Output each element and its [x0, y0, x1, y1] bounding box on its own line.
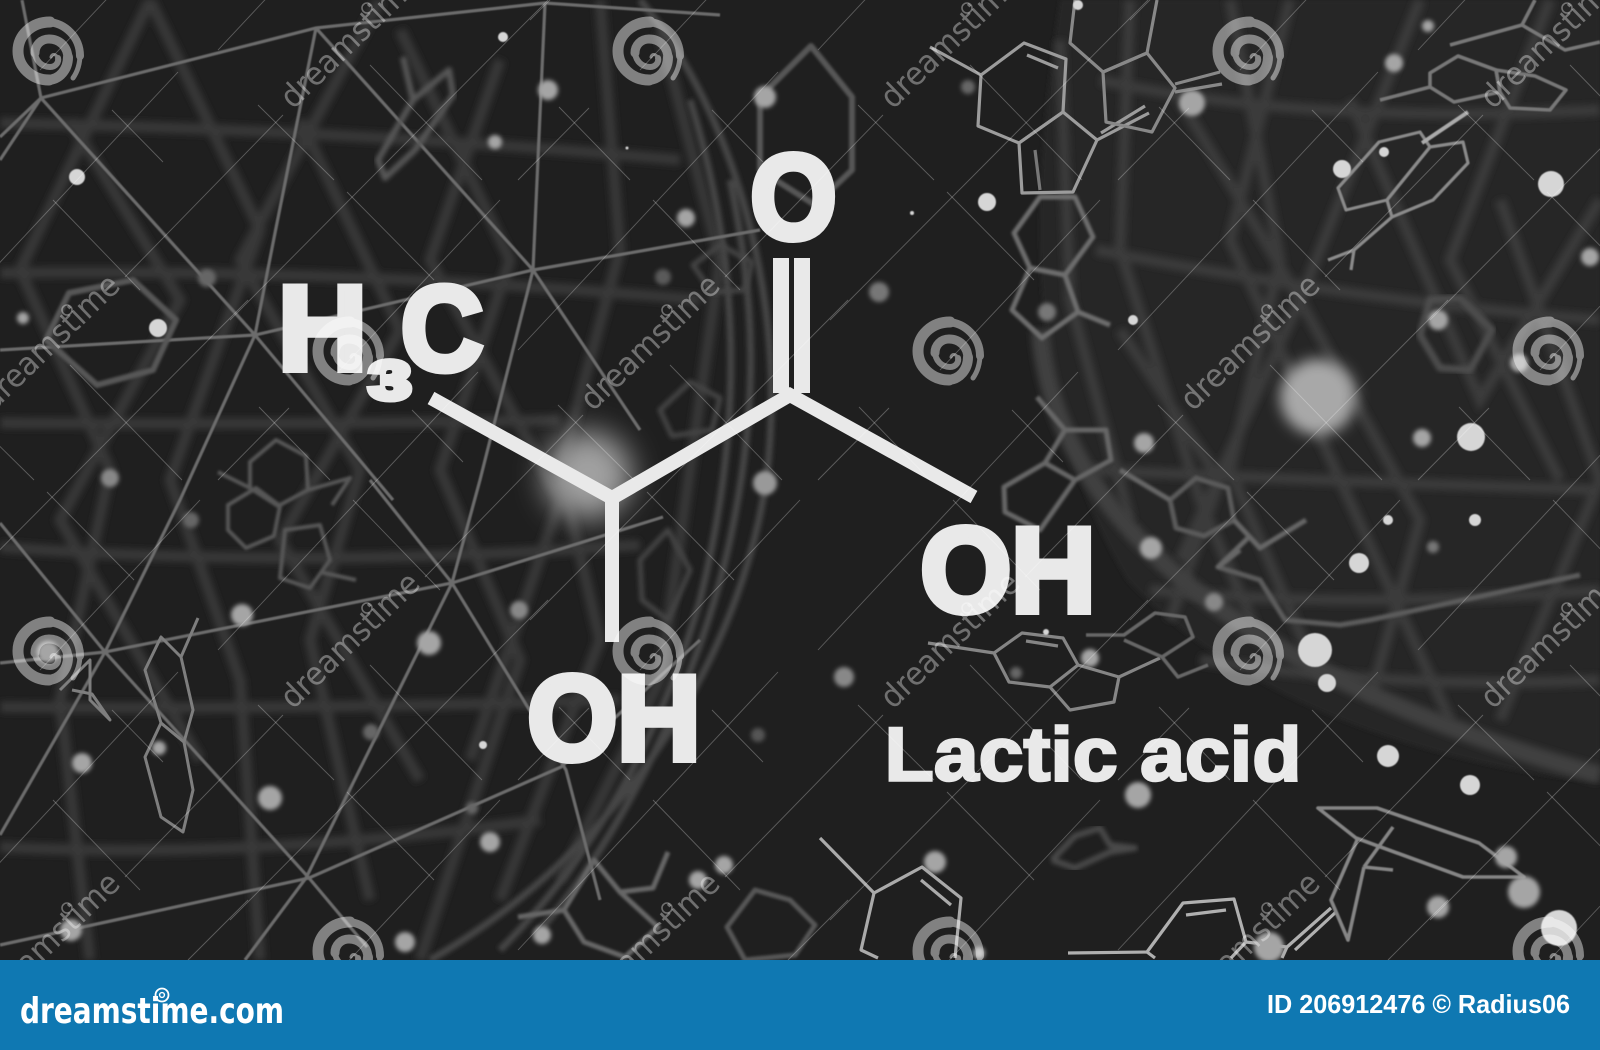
formula labels: H — [278, 262, 367, 396]
glow: large sphere right — [1280, 359, 1356, 435]
watermark text: dreamstime — [272, 564, 427, 716]
footer credit: image ID and author: ID 206912476 © Radius06 — [1267, 989, 1570, 1019]
right network sphere — [1040, 0, 1600, 783]
molecule: right dark cluster — [1420, 298, 1492, 370]
footer logo: dreamstime.com: dreamstime.com — [20, 991, 284, 1032]
molecule: bottom right chain — [1068, 899, 1336, 958]
single and double bonds — [431, 258, 974, 642]
molecule: bottom centre-left — [518, 852, 668, 957]
watermark text: dreamstime — [1172, 266, 1327, 418]
formula labels: O — [750, 130, 836, 264]
chemical structure: lactic acid — [278, 130, 1096, 786]
molecule: top centre — [930, 0, 1222, 193]
footer bar — [0, 960, 1600, 1050]
glow: central carbon — [544, 431, 632, 519]
glow spots — [544, 359, 1356, 519]
formula labels: OH — [920, 504, 1096, 638]
molecule: bottom right — [1318, 808, 1524, 940]
molecule: below centre — [1012, 197, 1110, 338]
network strands — [0, 0, 760, 960]
watermark text: dreamstime — [1172, 864, 1327, 1016]
molecule: lower left chain — [60, 618, 198, 832]
watermark text: dreamstime — [572, 266, 727, 418]
molecule: top left squiggle — [378, 57, 453, 178]
molecule: upper right fused rings — [1328, 112, 1468, 270]
left network sphere — [0, 0, 771, 960]
molecule: hexagon left — [46, 280, 176, 385]
molecule: left middle rings — [218, 440, 356, 588]
formula labels: C — [401, 262, 483, 396]
watermark text: dreamstime — [872, 564, 1027, 716]
molecule: right of hydroxyl — [1004, 397, 1580, 625]
formula labels — [278, 130, 1096, 786]
molecule: under hydroxyl — [928, 613, 1208, 710]
molecule: bottom ring — [727, 890, 815, 960]
formula labels: 3 — [369, 351, 411, 411]
title: Lactic acid: Lactic acid — [884, 712, 1302, 798]
watermark text: dreamstime — [572, 864, 727, 1016]
molecule: bottom centre — [820, 838, 961, 958]
molecule: behind carbonyl — [640, 245, 752, 620]
molecule: top centre ring — [760, 46, 852, 205]
formula labels: OH — [528, 652, 700, 786]
molecule: small mid bottom — [1052, 828, 1135, 868]
molecule: top right — [1380, 0, 1600, 110]
